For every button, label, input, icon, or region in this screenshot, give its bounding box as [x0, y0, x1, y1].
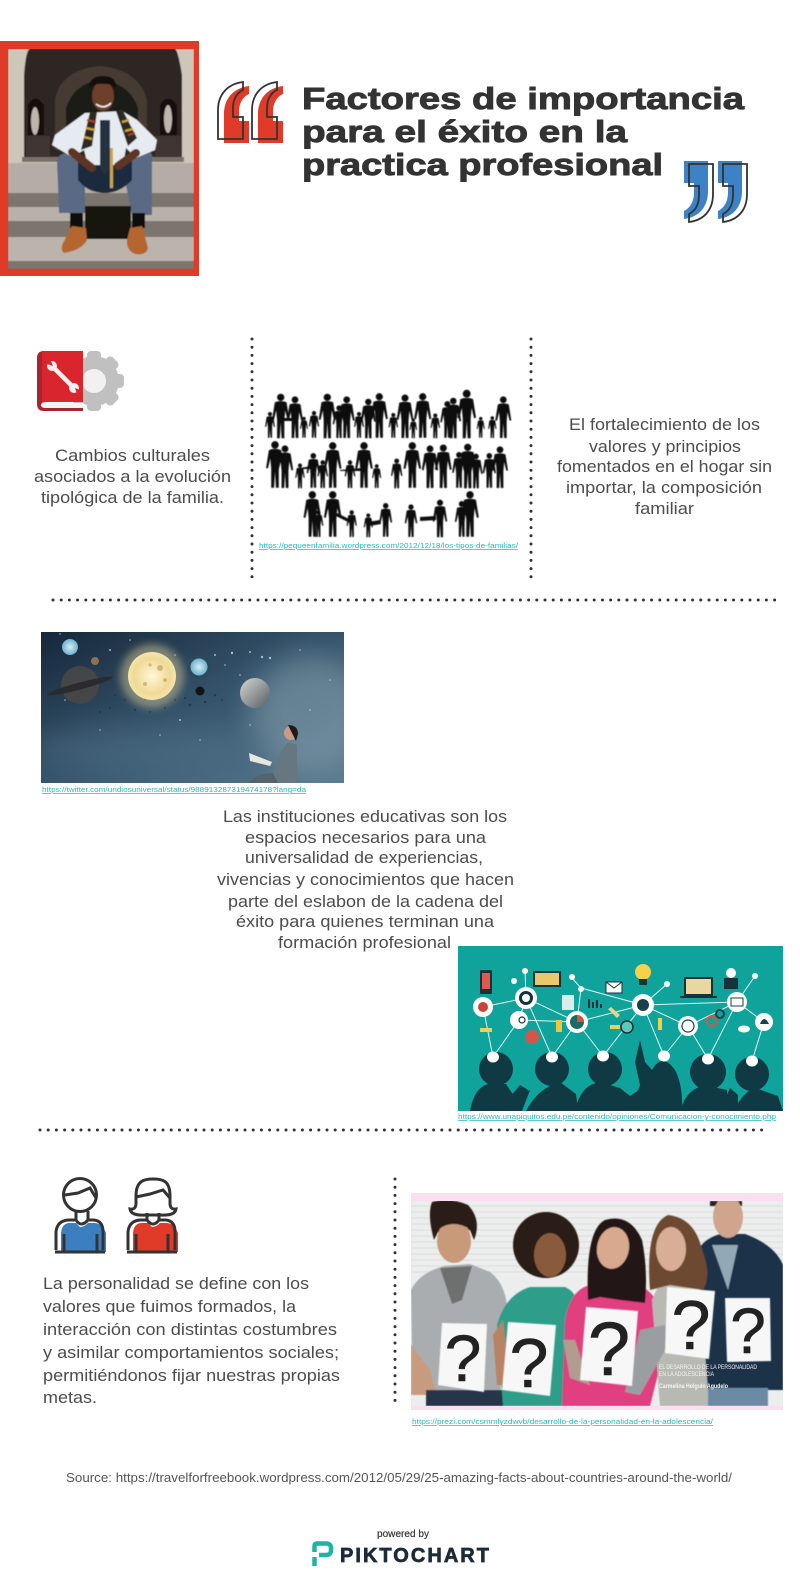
- icon: opening quotation marks: [218, 82, 283, 143]
- question mark: sign 5: ?: [730, 1295, 766, 1367]
- text: educational institutions: Las instituciones educativas son los: [223, 807, 507, 826]
- text: personality definition: permitiéndonos fijar nuestras propias: [43, 1366, 340, 1385]
- link: family image source: https://pequeenfamilia.wordpress.com/2012/12/18/los-tipos-de-familias/: [259, 541, 519, 550]
- link: universe image source: https://twitter.com/undiosuniversal/status/988913287319474178?lang=da: [42, 785, 307, 794]
- text: educational institutions: vivencias y conocimientos que hacen: [217, 870, 514, 889]
- panel: personality: [43, 1178, 783, 1426]
- text: personality definition: [43, 1274, 340, 1407]
- text: educational institutions: formación profesional: [278, 933, 451, 952]
- text: strengthening values: importar, la composición: [566, 478, 762, 497]
- panel: header: [0, 41, 747, 276]
- text: educational institutions: espacios necesarios para una: [245, 828, 487, 847]
- question mark: sign 3: ?: [588, 1307, 630, 1392]
- text: cultural changes: Cambios culturales: [55, 446, 210, 465]
- panel: education: [30, 632, 783, 1121]
- question mark: sign 2: ?: [510, 1324, 548, 1402]
- text: personality definition: y asimilar comportamientos sociales;: [43, 1343, 339, 1362]
- title: Factores de importancia: [302, 81, 745, 116]
- text: Piktochart wordmark: PIKTOCHART: [340, 1545, 489, 1567]
- text: educational institutions: parte del eslabon de la cadena del: [228, 892, 503, 911]
- title: practica profesional: [302, 147, 663, 182]
- text: personality definition: metas.: [43, 1388, 97, 1407]
- title: [302, 81, 745, 182]
- text: personality definition: valores que fuimos formados, la: [43, 1297, 297, 1316]
- text: strengthening values: fomentados en el hogar sin: [557, 457, 772, 476]
- source line: Source: https://travelforfreebook.wordpress.com/2012/05/29/25-amazing-facts-about-countries-around-the-world/: [66, 1470, 732, 1485]
- panel: family: [34, 339, 772, 578]
- text: personality definition: interacción con distintas costumbres: [43, 1320, 337, 1339]
- footer: Piktochart branding: [314, 1528, 489, 1567]
- title: para el éxito en la: [302, 114, 628, 149]
- text: educational institutions: universalidad de experiencias,: [245, 848, 483, 867]
- text: cultural changes: [34, 446, 231, 507]
- text: cultural changes: tipológica de la familia.: [41, 488, 224, 507]
- question mark: sign 1: ?: [445, 1321, 481, 1395]
- text: educational institutions: éxito para quienes terminan una: [236, 912, 495, 931]
- caption inside image: [659, 1365, 758, 1390]
- caption inside image: Carmelina Holguín Agudelo: [659, 1384, 728, 1390]
- photo: graduate sitting on steps with red frame: [0, 41, 199, 276]
- icon: man: [55, 1178, 106, 1252]
- text: educational institutions: [217, 807, 514, 952]
- text: strengthening values: [557, 415, 772, 518]
- image: young people holding question mark signs: [411, 1193, 783, 1410]
- text: strengthening values: El fortalecimiento de los: [569, 415, 760, 434]
- image: man with book looking at planets: [41, 632, 344, 783]
- icon: book and gear: [37, 351, 124, 411]
- text: strengthening values: valores y principios: [589, 437, 741, 456]
- image: people connected by knowledge network: [458, 946, 783, 1111]
- icon: woman: [127, 1179, 178, 1252]
- caption inside image: EL DESARROLLO DE LA PERSONALIDAD: [659, 1365, 758, 1371]
- link: knowledge image source: https://www.unapiquitos.edu.pe/contenido/opiniones/Comunicacion-y-conocimiento.php: [458, 1112, 776, 1121]
- text: powered by: powered by: [377, 1528, 430, 1540]
- question mark: sign 4: ?: [672, 1286, 710, 1364]
- text: strengthening values: familiar: [635, 499, 694, 518]
- image: family silhouettes: [265, 390, 511, 537]
- link: personality image source: https://prezi.com/csmmlyzdwvb/desarrollo-de-la-personalidad-en-la-adolescencia/: [412, 1417, 714, 1426]
- icon: Piktochart logo: [314, 1544, 331, 1566]
- icon: closing quotation marks: [684, 161, 747, 222]
- text: personality definition: La personalidad se define con los: [43, 1274, 309, 1293]
- text: cultural changes: asociados a la evolución: [34, 467, 231, 486]
- caption inside image: EN LA ADOLESCENCIA: [659, 1372, 714, 1378]
